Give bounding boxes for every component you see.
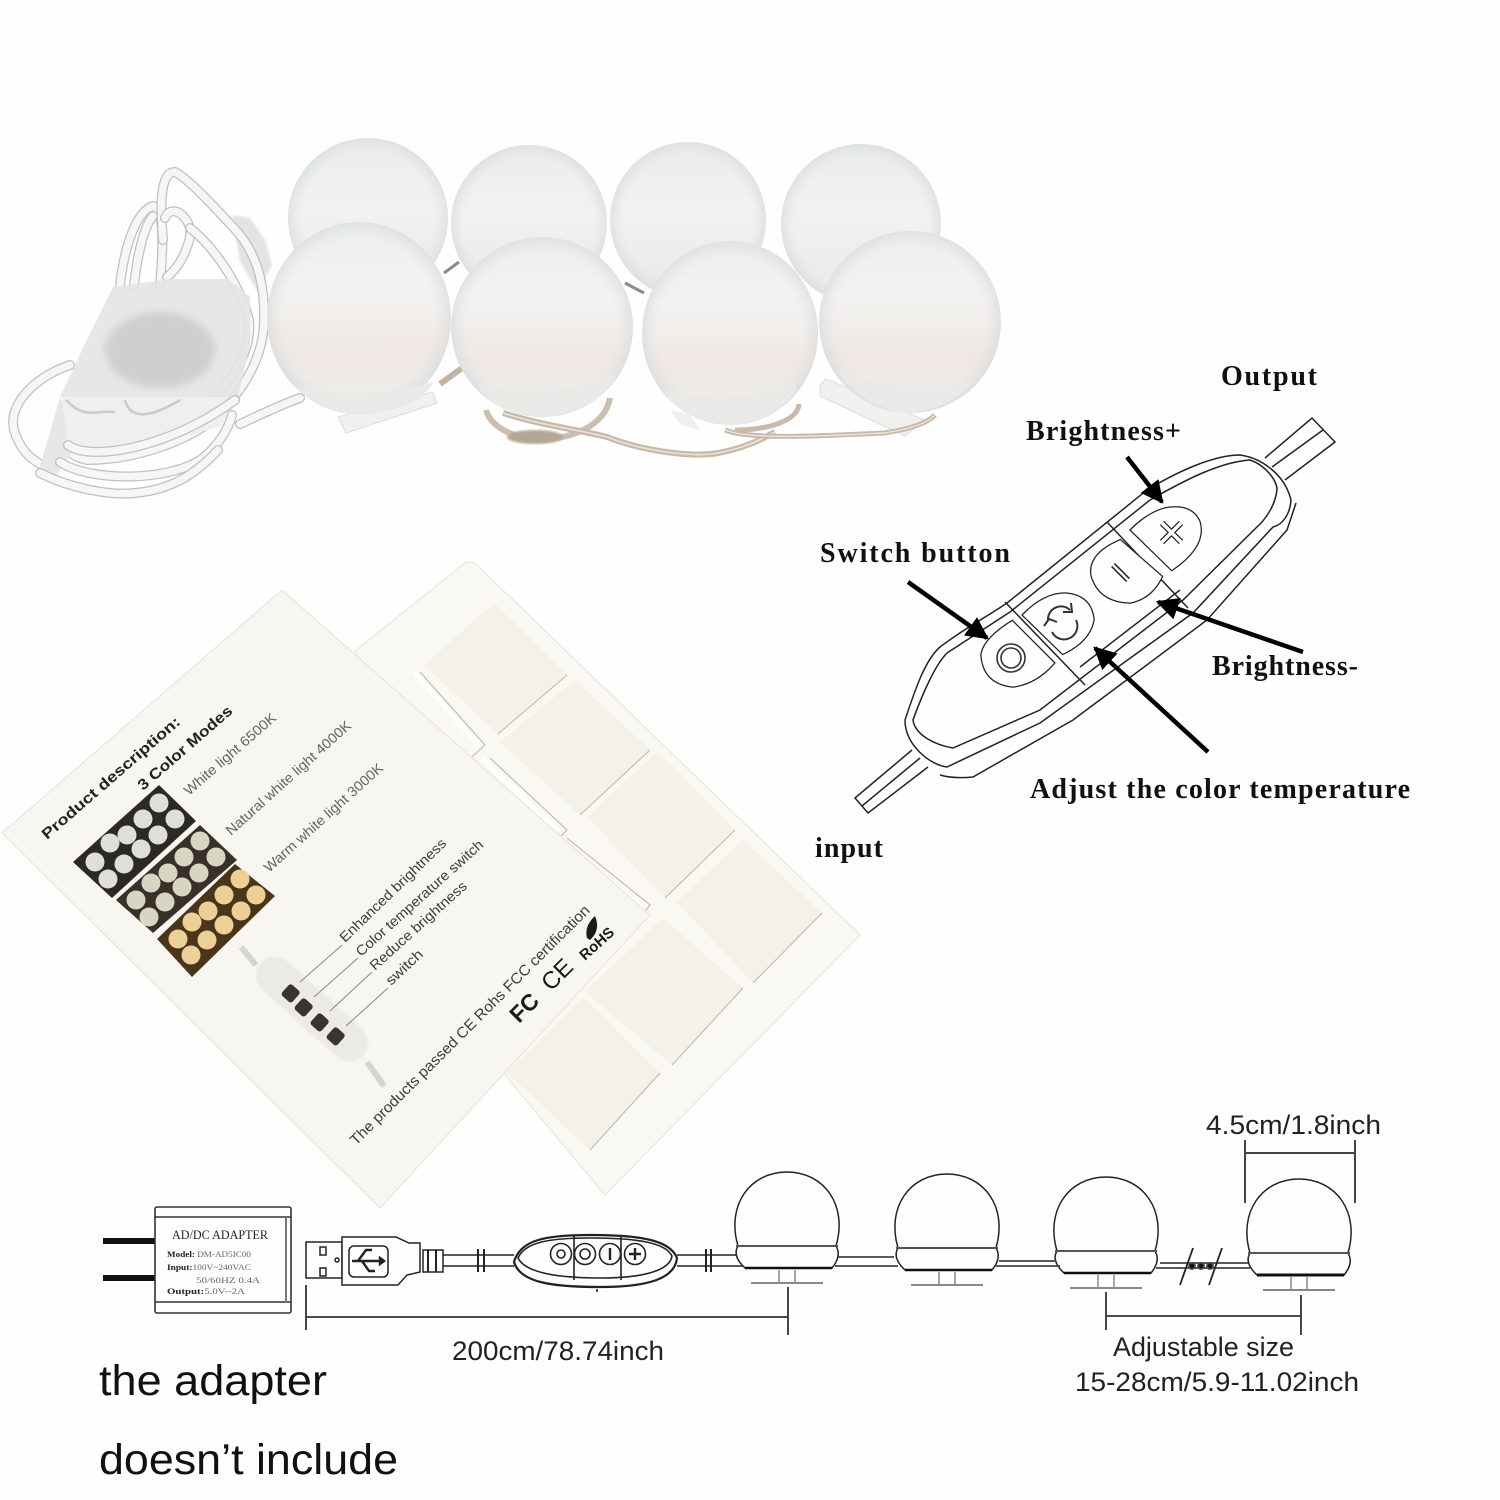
controller function labels — [336, 835, 486, 988]
certification logos: CE — [536, 954, 579, 996]
note: adapter line 2: doesn’t include — [99, 1436, 398, 1484]
text: adjustable range: 15-28cm/5.9-11.02inch — [1075, 1367, 1359, 1397]
arrow: brightness minus — [1158, 602, 1303, 652]
product photo: front row of bulbs — [267, 222, 1001, 425]
controller body outline — [905, 455, 1296, 778]
inline controller drawing — [514, 1235, 677, 1292]
mini controller photo — [241, 945, 388, 1086]
dimension: cable length — [306, 1285, 788, 1335]
certification logos: FC — [504, 987, 544, 1028]
adapter drawing: Input: 100V~240VAC — [167, 1262, 251, 1272]
card color mode labels: Natural white light 4000K — [222, 717, 355, 838]
product photo: clear wires and mounting stickers — [338, 368, 935, 455]
controller function labels: Enhanced brightness — [336, 835, 449, 945]
button: brightness minus — [1093, 542, 1160, 601]
card color mode labels: White light 6500K — [180, 709, 280, 798]
button: brightness plus — [1133, 509, 1199, 568]
text: cable length: 200cm/78.74inch — [452, 1336, 664, 1366]
certification logos — [504, 916, 618, 1028]
product photo: instruction card — [2, 590, 650, 1208]
adapter drawing: Model: DM-AD5IC00 — [167, 1249, 251, 1259]
label: Switch button: Switch button — [820, 538, 1010, 569]
wires to mini controller — [443, 1249, 745, 1272]
adapter drawing: Output: 5.0V--2A — [167, 1286, 246, 1296]
input wire — [855, 750, 928, 813]
text: bulb width: 4.5cm/1.8inch — [1206, 1110, 1381, 1140]
certification sentence: The products passed CE Rohs FCC certification — [347, 902, 594, 1149]
label: Adjust the color temperature: Adjust the color temperature — [1030, 774, 1410, 805]
adapter drawing: AD/DC ADAPTER — [172, 1227, 268, 1242]
bulb diagram 2 — [895, 1174, 999, 1285]
controller function labels: Color temperature switch — [352, 836, 486, 959]
label: Output: Output — [1221, 361, 1318, 392]
text: adjustable size: Adjustable size — [1113, 1332, 1294, 1362]
card heading: Product description: — [38, 713, 184, 843]
bulb diagram 1 — [735, 1172, 839, 1283]
packing tape — [60, 279, 250, 397]
certification logos: RoHS — [576, 924, 618, 964]
dimension: adjustable spacing — [1106, 1292, 1301, 1335]
card color mode labels: Warm white light 3000K — [260, 759, 387, 875]
button: power switch — [983, 623, 1052, 685]
arrow: color temperature — [1095, 648, 1208, 752]
adapter drawing — [103, 1207, 291, 1313]
arrow: switch button — [908, 582, 987, 638]
color mode swatch: warm — [157, 864, 275, 977]
card color mode labels — [180, 709, 387, 875]
USB plug drawing — [306, 1237, 443, 1285]
labelled controller diagram — [855, 418, 1335, 813]
controller function labels: Reduce brightness — [366, 878, 470, 973]
label: Brightness-: Brightness- — [1212, 651, 1358, 682]
bulb diagram 3 — [1054, 1177, 1158, 1288]
arrow: brightness plus — [1127, 457, 1162, 502]
controller function labels: switch — [382, 946, 426, 988]
dimension: bulb width — [1245, 1140, 1355, 1203]
color mode swatch: natural — [116, 825, 237, 933]
product photo: sticker sheet — [355, 562, 860, 1195]
label: input: input — [815, 833, 884, 864]
output wire — [1265, 418, 1335, 480]
note: adapter line 1: the adapter — [99, 1357, 327, 1405]
card subheading: 3 Color Modes — [134, 702, 236, 794]
color mode swatch: white — [73, 785, 196, 898]
adapter drawing: 50/60HZ 0.4A — [196, 1275, 261, 1285]
bulb diagram 4 — [1247, 1179, 1351, 1290]
product photo: back row of bulbs — [288, 138, 941, 304]
wires between bulbs — [835, 1248, 1250, 1285]
label: Brightness+: Brightness+ — [1026, 416, 1181, 447]
product photo: coiled USB cable — [13, 172, 300, 494]
button: color temperature switch — [1025, 595, 1092, 652]
